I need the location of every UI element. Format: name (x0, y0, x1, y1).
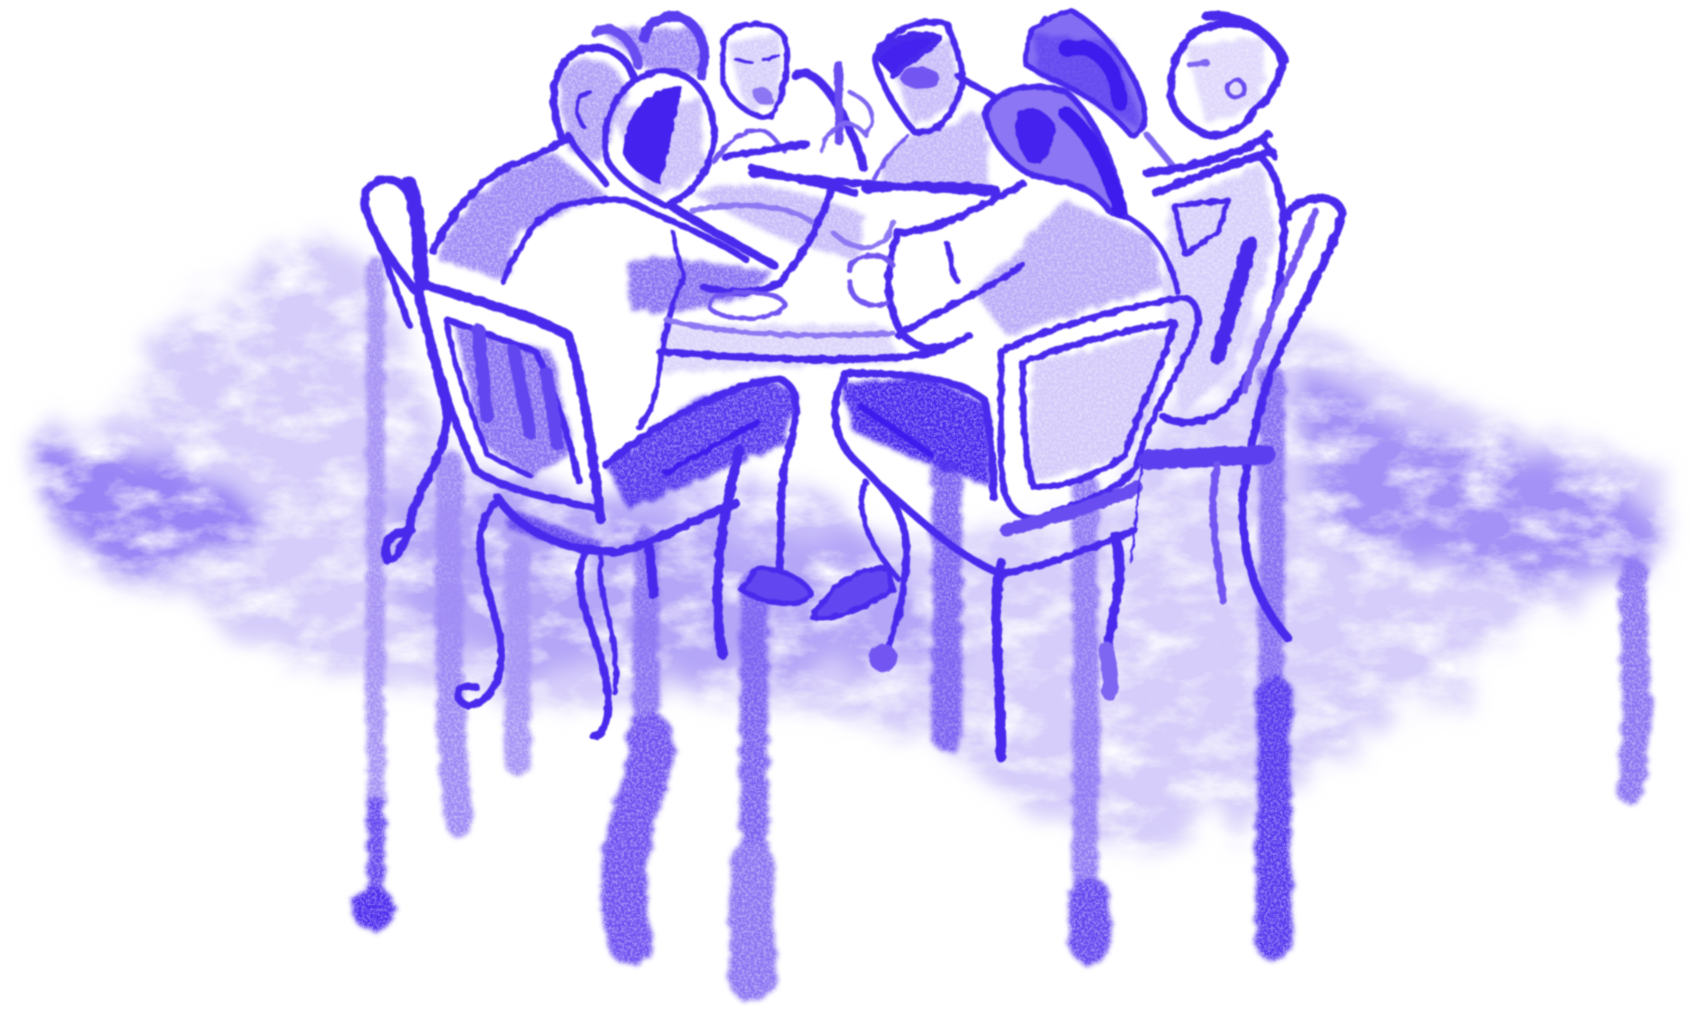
left diner back fill (438, 151, 606, 281)
far diners (595, 16, 872, 168)
front diner head tint (611, 97, 703, 200)
drip 8 (1260, 379, 1284, 757)
diner dark hair (1026, 11, 1174, 168)
far diners hair tint (601, 27, 703, 76)
chair seat and legs (498, 498, 736, 552)
drip 3 (505, 552, 529, 763)
seat under left chair (509, 509, 649, 552)
front chair right (862, 298, 1198, 757)
center diner face tint (887, 38, 958, 128)
diner with glasses (723, 24, 787, 117)
left diner head fill (557, 59, 628, 162)
front chair left (420, 284, 739, 736)
left chair back pad (455, 325, 574, 476)
dark hair tint (1034, 32, 1142, 130)
drip 5 (741, 584, 767, 866)
diner front right (888, 87, 1178, 348)
far right diner face tint (1185, 38, 1266, 124)
table and dishes (660, 144, 996, 359)
forearm shadow (626, 259, 774, 314)
line work (365, 11, 1342, 757)
right diner sweater fill (974, 200, 1163, 335)
drip 9 (1630, 574, 1637, 790)
right chair back pad (1028, 330, 1169, 482)
leg left (606, 379, 812, 603)
back chair left (365, 179, 447, 561)
drip 7 (1074, 487, 1098, 898)
diner right profile (1147, 16, 1285, 422)
far right diner shirt fill (1163, 162, 1277, 417)
left leg dark (606, 379, 799, 509)
drip 1 (367, 265, 384, 806)
paint drips (352, 265, 1637, 979)
tablecloth tint (660, 325, 898, 373)
drip 2 (449, 465, 459, 822)
leg right (812, 373, 994, 672)
drip 4 (634, 541, 658, 736)
glasses diner face tint (727, 32, 781, 114)
watercolor wash (27, 236, 1675, 855)
back chair right (1131, 198, 1342, 638)
center diner (874, 22, 1001, 179)
tinted clothes and fills (438, 27, 1277, 552)
table plate tint (693, 186, 866, 260)
diner front left (503, 70, 833, 427)
drip 6 (933, 476, 961, 736)
diner left back (433, 48, 633, 251)
right leg dark (839, 373, 990, 487)
center diner shirt fill (882, 108, 990, 189)
